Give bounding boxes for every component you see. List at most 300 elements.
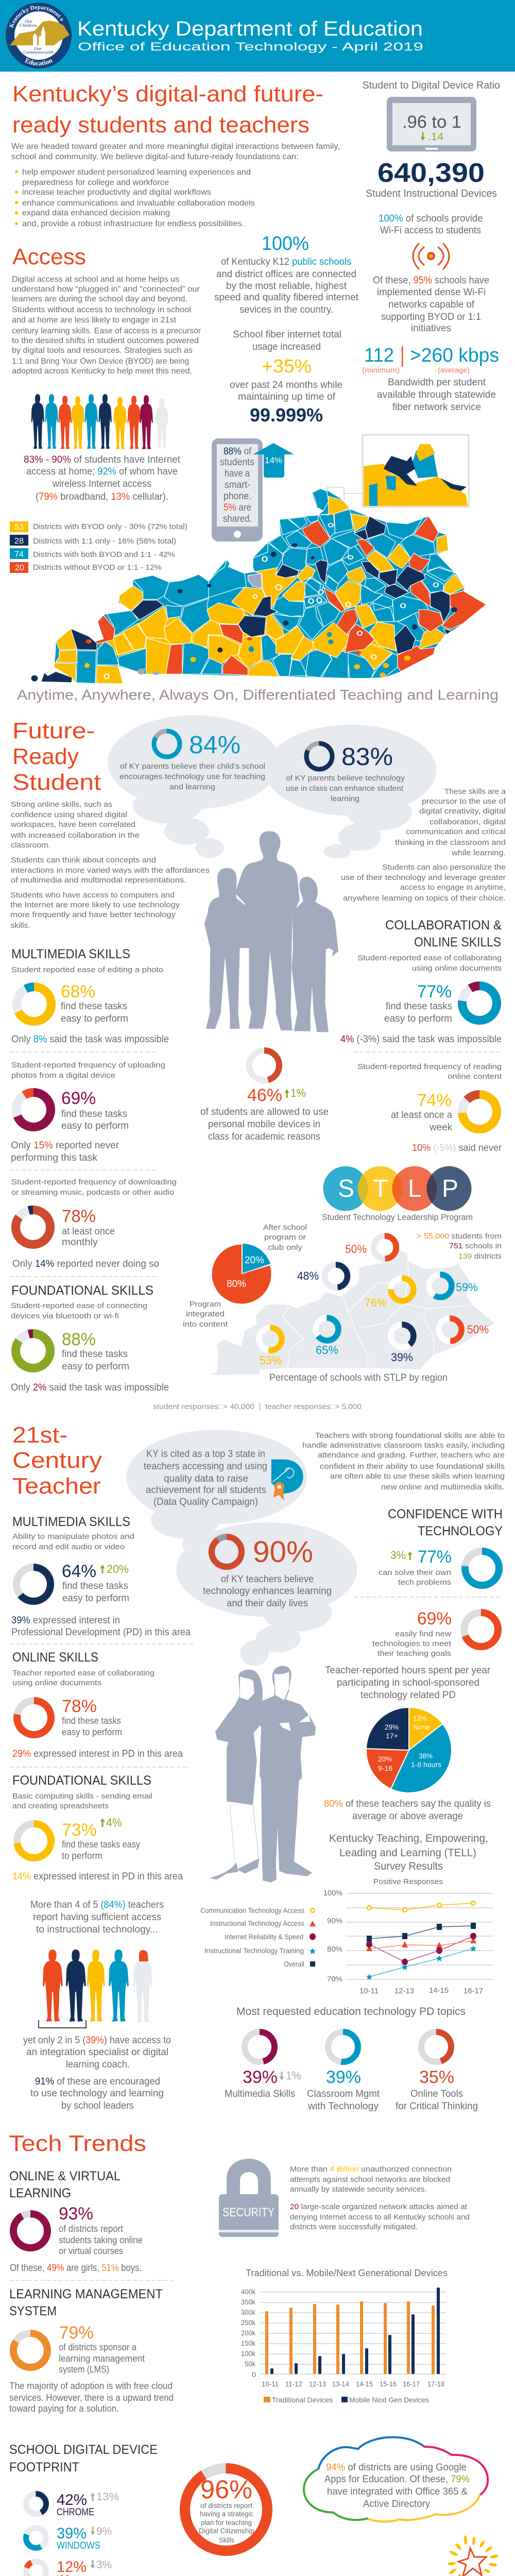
instructional technology access text: report having sufficient access bbox=[33, 1912, 161, 1923]
stat: editing a photo 68%: Student reported ease of editing a photo bbox=[11, 965, 163, 974]
device footprint: chrome bbox=[26, 2491, 119, 2518]
stat: personal mobile devices 46%: of students are allowed to use bbox=[200, 1107, 329, 1117]
stat: tech problems 77%: tech problems bbox=[398, 1578, 451, 1587]
teacher right paragraph: are often able to use these skills when learning bbox=[330, 1472, 505, 1481]
STLP logo circles: Student Technology Leadership Program bbox=[322, 1212, 473, 1222]
survey response counts bbox=[153, 1402, 362, 1411]
TELL survey heading: Leading and Learning (TELL) bbox=[339, 1847, 476, 1859]
chart legend: Overall bbox=[284, 1960, 304, 1968]
heading: school digital device footprint: FOOTPRINT bbox=[9, 2460, 79, 2475]
device footprint: chrome: 13% bbox=[96, 2491, 119, 2503]
stat: uploading photos 69%: Only 15% reported never bbox=[11, 1140, 119, 1151]
section heading: Future-Ready Student: Student bbox=[12, 770, 101, 795]
security text: More than 4 Billion unauthorized connection bbox=[290, 2165, 452, 2174]
device footprint: iOS: 12% bbox=[57, 2558, 87, 2575]
line chart: TELL survey: 12-13 bbox=[394, 1987, 414, 1995]
stat: collaborating online 77%: Student-reported ease of collaborating bbox=[357, 954, 502, 962]
stat: streaming audio 78%: Only 14% reported never doing so bbox=[12, 1259, 159, 1269]
instructional technology access text: to instructional technology... bbox=[36, 1924, 158, 1935]
stat: 84% parents: of KY parents believe their child’s school bbox=[120, 762, 265, 771]
stat: teacher multimedia 64%: 20% bbox=[107, 1563, 129, 1575]
future-ready left text: classroom. bbox=[11, 841, 50, 850]
future-ready right text: These skills are a bbox=[444, 787, 506, 796]
STLP map by region bbox=[209, 1236, 494, 1383]
chart legend: Communication Technology Access bbox=[200, 1906, 304, 1914]
legend: district map: Districts with BYOD only - 30% (72% total) bbox=[33, 522, 187, 531]
stat: digital citizenship 96%: of districts report bbox=[200, 2501, 252, 2510]
stat: online courses 93%: or virtual courses bbox=[59, 2246, 123, 2256]
region donut: north 50% bbox=[345, 1236, 397, 1259]
home internet stat bbox=[24, 454, 181, 502]
stat: LMS 79%: 79% bbox=[59, 2323, 94, 2343]
device footprint: windows: 9% bbox=[96, 2526, 112, 2537]
stat: reading online 74%: at least once a bbox=[391, 1110, 452, 1121]
icon: KDE seal: Children, bbox=[20, 23, 38, 28]
pie chart: PD hours: 13% bbox=[413, 1714, 427, 1722]
device ratio panel: Student to Digital Device Ratio bbox=[363, 80, 500, 91]
stat: LMS 79%: toward paying for a solution. bbox=[9, 2403, 119, 2414]
fiber stat column: speed and quality fibered internet bbox=[214, 292, 359, 303]
device count: 640,390 bbox=[377, 158, 485, 188]
main title: Kentucky’s digital-and future- bbox=[12, 81, 323, 107]
pie chart: PD hours bbox=[366, 1707, 452, 1793]
heading: learning management system bbox=[9, 2287, 163, 2318]
legend: district map bbox=[10, 521, 187, 573]
donut: online tools: Online Tools bbox=[410, 2089, 463, 2099]
security text: denying Internet access to all Kentucky schools and bbox=[290, 2213, 470, 2222]
line chart: TELL survey: 16-17 bbox=[464, 1987, 483, 1995]
stat: reading online 74%: week bbox=[429, 1122, 452, 1133]
access paragraph: learners are during the school day and beyond. bbox=[12, 295, 187, 303]
pie chart: PD hours: 38% bbox=[419, 1752, 433, 1760]
thought bubbles: teachers bbox=[127, 1430, 357, 1666]
dense wi-fi text: initiatives bbox=[411, 323, 451, 334]
pie chart: STLP program type: Program bbox=[190, 1300, 221, 1309]
stat: teacher online 78%: using online documents bbox=[12, 1679, 101, 1687]
section heading: Future-Ready Student: Ready bbox=[12, 744, 79, 769]
stat: personal mobile devices 46%: 1% bbox=[290, 1087, 306, 1099]
access paragraph: adopted across Kentucky to help meet this need. bbox=[12, 367, 192, 376]
stat: editing a photo 68%: Only 8% said the task was impossible bbox=[11, 1034, 169, 1045]
stat: personal mobile devices 46%: class for academic reasons bbox=[208, 1131, 320, 1142]
stat: new technologies 69%: technologies to meet bbox=[372, 1639, 452, 1648]
data quality callout: teachers accessing and using bbox=[144, 1461, 267, 1472]
stat: digital citizenship 96%: Digital Citizenship bbox=[199, 2527, 254, 2535]
region donut: east 50% bbox=[439, 1318, 489, 1341]
stat: teacher foundational 73%: 14% expressed interest in PD in this area bbox=[12, 1871, 183, 1882]
donut: classroom management: Classroom Mgmt bbox=[307, 2089, 380, 2099]
PD topics panel: Most requested education technology PD topics bbox=[236, 2006, 466, 2018]
stat: teacher online 78%: easy to perform bbox=[62, 1727, 122, 1737]
heading: collaboration and online skills: ONLINE SKILLS bbox=[414, 935, 501, 950]
stat: tech problems 77%: can solve their own bbox=[379, 1568, 451, 1577]
stat: teachers 90%: technology enhances learning bbox=[203, 1586, 332, 1597]
future-ready left text: with increased collaboration in the bbox=[10, 831, 140, 840]
bandwidth stat: (minimum) bbox=[362, 366, 400, 374]
stat: digital citizenship 96%: Skills bbox=[219, 2536, 234, 2544]
data quality callout: achievement for all students bbox=[146, 1485, 266, 1496]
pie chart: PD hours: 9-16 bbox=[378, 1764, 392, 1772]
heading: student foundational skills: FOUNDATIONAL SKILLS bbox=[11, 1283, 153, 1298]
bullet list: increase teacher productivity and digital workflows bbox=[22, 188, 211, 197]
future-ready left text: the Internet are more likely to use technology bbox=[10, 901, 180, 909]
stat: tech problems 77%: 77% bbox=[418, 1547, 452, 1567]
STLP logo circles: P bbox=[442, 1175, 458, 1202]
security text: 20 large-scale organized network attacks aimed at bbox=[290, 2202, 468, 2211]
stat: teacher multimedia 64%: 39% expressed interest in bbox=[11, 1615, 120, 1626]
bar chart: traditional vs mobile devices: 16-17 bbox=[403, 2380, 420, 2388]
instructional technology access text bbox=[30, 1900, 164, 1935]
icon: tablet: .14 bbox=[428, 131, 443, 143]
fiber stat column: usage increased bbox=[252, 342, 321, 352]
stat: collaborating online 77%: 77% bbox=[417, 982, 452, 1002]
line chart: TELL survey bbox=[200, 1889, 493, 1995]
bar chart: traditional vs mobile devices: 15-16 bbox=[380, 2380, 397, 2388]
stat: 84% parents: and learning bbox=[169, 783, 215, 791]
access paragraph: to the desired shifts in student outcomes powered bbox=[12, 336, 199, 345]
stat: 83% parents: 83% bbox=[341, 743, 393, 771]
future-ready right text: thinking in the classroom and bbox=[395, 838, 506, 847]
stat: reading online 74%: Student-reported frequency of reading bbox=[357, 1062, 502, 1071]
stat: teacher multimedia 64%: Professional Development (PD) in this area bbox=[11, 1627, 191, 1638]
future-ready left text: skills. bbox=[10, 921, 30, 930]
bar chart: traditional vs mobile devices: 10-11 bbox=[262, 2380, 279, 2388]
stat: LMS 79%: system (LMS) bbox=[59, 2364, 109, 2375]
pie chart: PD hours: 20% bbox=[378, 1755, 392, 1763]
stat: collaborating online 77%: using online documents bbox=[412, 964, 502, 973]
stat: teacher multimedia 64%: find these tasks bbox=[62, 1581, 128, 1591]
heading: collaboration and online skills: COLLABORATION & bbox=[385, 918, 502, 933]
pie chart: STLP program type: integrated bbox=[186, 1310, 225, 1318]
heading: collaboration and online skills bbox=[385, 918, 502, 950]
stat: teacher foundational 73%: find these tasks easy bbox=[62, 1839, 140, 1850]
PD hours heading bbox=[325, 1665, 491, 1701]
stat: reading online 74%: online content bbox=[448, 1072, 502, 1081]
survey response counts: teacher responses: > 5,000 bbox=[265, 1402, 362, 1411]
donut: multimedia skills bbox=[225, 2032, 301, 2099]
STLP reach text bbox=[417, 1232, 502, 1261]
future-ready left text bbox=[10, 800, 210, 930]
stat: teachers 90%: of KY teachers believe bbox=[221, 1574, 314, 1585]
future-ready right text: while learning. bbox=[451, 849, 506, 857]
bar chart: traditional vs mobile devices: 13-14 bbox=[332, 2380, 349, 2388]
stat: 84% parents bbox=[119, 731, 265, 791]
cloud callout: Google Apps bbox=[304, 2437, 488, 2521]
stat: reading online 74% bbox=[357, 1062, 502, 1154]
stat: collaborating online 77% bbox=[340, 954, 502, 1045]
access paragraph: understand how “plugged in” and “connected” our bbox=[12, 285, 200, 294]
STLP logo circles: S bbox=[338, 1175, 354, 1202]
legend: district map: 28 bbox=[14, 537, 24, 546]
stat: teacher online 78%: find these tasks bbox=[62, 1716, 121, 1726]
instructional technology access text: More than 4 of 5 (84%) teachers bbox=[30, 1900, 164, 1910]
bar chart: traditional vs mobile devices: 250k bbox=[241, 2318, 256, 2327]
bandwidth stat bbox=[362, 345, 499, 413]
region donut: 53%: 53% bbox=[260, 1354, 282, 1367]
icon: KDE seal: Our bbox=[34, 46, 42, 51]
intro paragraph: school and community. We believe digital-and future-ready foundations can: bbox=[11, 152, 299, 161]
stat: personal mobile devices 46%: personal mobile devices in bbox=[208, 1119, 320, 1130]
stat: connecting devices 88%: 88% bbox=[62, 1330, 96, 1349]
heading: student multimedia skills: MULTIMEDIA SKILLS bbox=[11, 947, 130, 961]
stat: teacher foundational 73%: 4% bbox=[106, 1816, 122, 1829]
stat: teacher online 78%: 78% bbox=[62, 1697, 97, 1716]
stat: uploading photos 69%: easy to perform bbox=[61, 1121, 129, 1131]
line chart: TELL survey: 90% bbox=[327, 1917, 342, 1925]
silhouettes: teachers row bbox=[39, 1950, 152, 2028]
cloud callout: Google Apps: Apps for Education. Of these, 79% bbox=[324, 2474, 470, 2485]
pie chart: STLP program type: After school bbox=[263, 1223, 307, 1232]
teacher right paragraph: handle administrative classroom tasks easily, including bbox=[302, 1441, 505, 1450]
legend: district map: Districts with 1:1 only - 16% (58% total) bbox=[33, 537, 176, 546]
bar chart: traditional vs mobile devices: 12-13 bbox=[309, 2380, 326, 2388]
heading: confidence with technology: CONFIDENCE WITH bbox=[388, 1507, 503, 1521]
wi-fi stat bbox=[379, 213, 483, 236]
legend: district map: Districts with both BYOD and 1:1 - 42% bbox=[33, 550, 175, 559]
integration specialist text: learning coach. bbox=[66, 2059, 130, 2070]
bar chart: traditional vs mobile devices: 100k bbox=[241, 2349, 256, 2358]
stat: online courses 93%: students taking online bbox=[59, 2235, 143, 2245]
fiber stat column bbox=[214, 233, 359, 426]
heading: learning management system: SYSTEM bbox=[9, 2304, 57, 2318]
wi-fi stat: 100% of schools provide bbox=[379, 213, 483, 224]
stat: digital citizenship 96%: plan for teaching bbox=[201, 2518, 252, 2527]
stat: teacher online 78%: Teacher reported ease of collaborating bbox=[12, 1669, 154, 1677]
section heading: 21st-Century Teacher: 21st- bbox=[12, 1422, 67, 1448]
stat: streaming audio 78%: Student-reported frequency of downloading bbox=[11, 1178, 177, 1187]
data quality callout: quality data to raise bbox=[164, 1473, 248, 1484]
stat: connecting devices 88%: Only 2% said the task was impossible bbox=[11, 1382, 169, 1393]
bar chart: traditional vs mobile devices: 0 bbox=[252, 2370, 256, 2379]
integration specialist text: to use technology and learning bbox=[30, 2088, 164, 2099]
icon: wi-fi signal bbox=[413, 244, 449, 269]
icon: KDE seal: Our bbox=[25, 19, 33, 24]
stat: reading online 74%: 10% (-5%) said never bbox=[412, 1143, 502, 1154]
TELL survey heading: Positive Responses bbox=[373, 1877, 443, 1886]
region donut: 59%: 59% bbox=[456, 1281, 478, 1294]
stat: digital citizenship 96%: having a strategic bbox=[200, 2510, 253, 2518]
region donut: 65% bbox=[316, 1318, 338, 1357]
stat: uploading photos 69%: photos from a digital device bbox=[11, 1071, 115, 1080]
map: Kentucky regions bbox=[209, 1247, 494, 1375]
data quality callout bbox=[144, 1449, 267, 1507]
header subtitle: Office of Education Technology - April 2019 bbox=[78, 40, 423, 53]
donut: classroom management: 39% bbox=[326, 2067, 361, 2087]
heading: school digital device footprint bbox=[9, 2443, 158, 2475]
device footprint: iOS bbox=[26, 2558, 112, 2576]
silhouettes: students row bbox=[31, 394, 168, 449]
stat: connecting devices 88%: Student-reported ease of connecting bbox=[11, 1301, 147, 1310]
future-ready right text: digital creativity, digital bbox=[419, 807, 506, 816]
cloud callout: Google Apps: Active Directory bbox=[363, 2499, 430, 2510]
PD quality note bbox=[324, 1799, 491, 1822]
heading: teacher online skills: ONLINE SKILLS bbox=[12, 1650, 98, 1665]
device footprint: iOS: 3% bbox=[96, 2559, 112, 2571]
icon: smartphone with stat: smart- bbox=[225, 480, 250, 490]
icon: KDE seal: Education bbox=[25, 58, 53, 66]
integration specialist text: by school leaders bbox=[61, 2100, 134, 2111]
stat: uploading photos 69%: 69% bbox=[61, 1089, 96, 1108]
region donut: east 50%: 50% bbox=[467, 1323, 489, 1336]
section heading: Future-Ready Student bbox=[12, 718, 101, 795]
TELL survey heading: Kentucky Teaching, Empowering, bbox=[329, 1833, 488, 1844]
security text bbox=[290, 2165, 470, 2231]
stat: teacher multimedia 64%: easy to perform bbox=[62, 1593, 129, 1604]
pie chart: PD hours: 29% bbox=[385, 1723, 399, 1731]
fiber stat column: +35% bbox=[262, 355, 312, 377]
section heading: Future-Ready Student: Future- bbox=[12, 718, 95, 743]
stat: editing a photo 68%: easy to perform bbox=[61, 1013, 128, 1024]
survey response counts: student responses: > 40,000 bbox=[153, 1402, 254, 1411]
stat: teacher foundational 73% bbox=[12, 1792, 183, 1882]
integration specialist text bbox=[23, 2035, 171, 2111]
stat: editing a photo 68%: find these tasks bbox=[61, 1001, 127, 1012]
icon: KDE seal: Commonwealth bbox=[23, 50, 54, 55]
legend: district map: 53 bbox=[14, 523, 24, 532]
dense wi-fi text: supporting BYOD or 1:1 bbox=[381, 312, 481, 323]
legend: district map: Districts without BYOD or 1:1 - 12% bbox=[33, 563, 162, 572]
device footprint: windows bbox=[26, 2525, 112, 2551]
icon: tablet bbox=[387, 97, 476, 151]
stat: 84% parents: 84% bbox=[189, 732, 241, 759]
region donut: 48% bbox=[297, 1265, 347, 1287]
chart legend: Mobile Next Gen Devices bbox=[349, 2396, 429, 2404]
future-ready left text: Strong online skills, such as bbox=[11, 800, 112, 809]
bar chart: traditional vs mobile devices: 150k bbox=[241, 2339, 256, 2347]
stat: uploading photos 69%: performing this task bbox=[11, 1153, 97, 1163]
section heading: 21st-Century Teacher: Teacher bbox=[12, 1473, 101, 1499]
access paragraph: Students without access to technology in school bbox=[12, 306, 191, 314]
security text: attempts against school networks are blocked bbox=[290, 2175, 450, 2184]
icon: star with rays bbox=[448, 2535, 499, 2576]
bar chart: traditional vs mobile devices: 14-15 bbox=[356, 2380, 373, 2388]
stat: 84% parents: encourages technology use for teaching bbox=[119, 772, 265, 781]
dense wi-fi text: implemented dense Wi-Fi bbox=[377, 287, 486, 298]
chart legend: Instructional Technology Access bbox=[210, 1919, 304, 1927]
donut: online tools: for Critical Thinking bbox=[396, 2101, 478, 2112]
access paragraph: by digital tools and resources. Strategies such as bbox=[12, 346, 193, 355]
teacher right paragraph: new online and multimedia skills. bbox=[381, 1483, 505, 1492]
bullet list: expand data enhanced decision making bbox=[22, 209, 170, 217]
stat: LMS 79%: The majority of adoption is with free cloud bbox=[9, 2381, 173, 2391]
bar chart: traditional vs mobile devices: 300k bbox=[241, 2308, 256, 2316]
PD hours heading: participating in school-sponsored bbox=[337, 1677, 479, 1688]
stat: online courses 93%: Of these, 49% are girls, 51% boys. bbox=[10, 2263, 142, 2274]
future-ready right text: collaboration, digital bbox=[430, 818, 506, 826]
future-ready right text: anywhere learning on topics of their choice. bbox=[343, 894, 506, 903]
map: Kentucky districts by device program bbox=[31, 488, 486, 684]
header title: Kentucky Department of Education bbox=[77, 18, 423, 40]
stat: streaming audio 78%: at least once bbox=[62, 1226, 115, 1237]
stat: teacher foundational 73%: 73% bbox=[62, 1820, 97, 1840]
bullet list: enhance communications and invaluable collaboration models bbox=[22, 199, 255, 208]
intro paragraph bbox=[11, 142, 340, 161]
tagline: Anytime, Anywhere, Always On, Differentiated Teaching and Learning bbox=[17, 687, 499, 703]
stat: LMS 79%: services. However, there is a upward trend bbox=[9, 2393, 174, 2403]
teacher right paragraph: confident in their ability to use foundational skills bbox=[320, 1462, 505, 1471]
line chart: TELL survey: 100% bbox=[323, 1889, 342, 1897]
region donut: 53% bbox=[259, 1328, 282, 1367]
heading: confidence with technology: TECHNOLOGY bbox=[418, 1524, 503, 1538]
icon: security padlock: SECURITY bbox=[222, 2206, 274, 2219]
icon: smartphone with stat bbox=[212, 438, 263, 541]
chart legend: Traditional Devices bbox=[272, 2396, 333, 2404]
icon: smartphone with stat: 88% of bbox=[224, 446, 252, 457]
future-ready left text: Students can think about concepts and bbox=[11, 856, 156, 865]
stat: tech problems 77% bbox=[379, 1547, 499, 1587]
map inset bbox=[327, 435, 469, 507]
future-ready left text: workspaces, have been correlated bbox=[10, 820, 135, 829]
stat: uploading photos 69%: find these tasks bbox=[61, 1109, 127, 1120]
heading: teacher multimedia skills: MULTIMEDIA SKILLS bbox=[12, 1515, 130, 1529]
region donut: 48%: 48% bbox=[297, 1269, 319, 1282]
access paragraph: and at home are less likely to engage in 21st bbox=[12, 316, 177, 325]
legend: district map: 74 bbox=[14, 550, 24, 559]
region donut: 39% bbox=[391, 1325, 414, 1364]
donut: online tools bbox=[396, 2032, 478, 2112]
donut: multimedia skills: 39% bbox=[243, 2067, 278, 2087]
stat: teacher foundational 73%: to perform bbox=[62, 1851, 102, 1861]
icon: smartphone with stat: students bbox=[220, 457, 254, 468]
teacher right paragraph: Teachers with strong foundational skills are able to bbox=[315, 1431, 505, 1440]
bandwidth stat: available through statewide bbox=[377, 389, 496, 400]
security text: annually by statewide security services. bbox=[290, 2185, 427, 2194]
region donut: 76%: 76% bbox=[365, 1296, 387, 1309]
stat: digital citizenship 96%: 96% bbox=[200, 2475, 252, 2504]
PD quality note: average or above average bbox=[352, 1811, 463, 1822]
access paragraph: Digital access at school and at home helps us bbox=[12, 275, 179, 284]
fiber stat column: and district offices are connected bbox=[216, 269, 356, 280]
stat: online courses 93% bbox=[10, 2204, 143, 2274]
section heading: 21st-Century Teacher: Century bbox=[12, 1448, 102, 1473]
stat: streaming audio 78% bbox=[11, 1178, 177, 1269]
future-ready right text bbox=[341, 787, 506, 903]
STLP logo circles: T bbox=[373, 1175, 388, 1202]
device ratio panel: Student Instructional Devices bbox=[366, 188, 497, 199]
bar chart: traditional vs mobile devices: 17-18 bbox=[427, 2380, 444, 2388]
pie chart: PD hours: None bbox=[413, 1723, 430, 1731]
wi-fi stat: Wi-Fi access to students bbox=[380, 225, 481, 236]
future-ready right text: Students can also personalize the bbox=[382, 863, 506, 872]
donut: multimedia skills: 1% bbox=[286, 2069, 301, 2082]
region donut: 59% bbox=[429, 1275, 478, 1297]
pie chart: PD hours: 17+ bbox=[386, 1732, 398, 1740]
arrow: smartphone increase: 14% bbox=[265, 455, 282, 465]
device footprint: chrome: 42% bbox=[57, 2492, 87, 2509]
integration specialist text: 91% of these are encouraged bbox=[35, 2076, 160, 2087]
access paragraph bbox=[12, 275, 201, 376]
device footprint: windows: WINDOWS bbox=[57, 2540, 100, 2551]
chart legend: Instructional Technology Training bbox=[204, 1946, 304, 1955]
icon: smartphone with stat: 5% are bbox=[224, 502, 251, 513]
access paragraph: 1:1 and Bring Your Own Device (BYOD) are being bbox=[12, 357, 189, 366]
stat: teacher multimedia 64%: Ability to manipulate photos and bbox=[12, 1532, 134, 1541]
header band bbox=[0, 0, 515, 72]
PD hours heading: technology related PD bbox=[360, 1690, 456, 1701]
heading: teacher foundational skills: FOUNDATIONAL SKILLS bbox=[12, 1773, 151, 1788]
STLP logo circles bbox=[322, 1166, 473, 1222]
data quality callout: (Data Quality Campaign) bbox=[153, 1497, 258, 1507]
pie chart: PD hours: 1-8 hours bbox=[411, 1760, 441, 1769]
stat: teacher multimedia 64%: record and edit audio or video bbox=[12, 1543, 125, 1551]
pie chart: STLP program type: 80% bbox=[227, 1279, 246, 1290]
icon: smartphone with stat: have a bbox=[225, 468, 250, 479]
region donut: 76% bbox=[365, 1278, 414, 1309]
stat: editing a photo 68% bbox=[11, 965, 169, 1045]
heading: learning management system: LEARNING MANAGEMENT bbox=[9, 2287, 163, 2301]
future-ready right text: communication and critical bbox=[406, 827, 506, 836]
stat: streaming audio 78%: 78% bbox=[62, 1207, 96, 1226]
